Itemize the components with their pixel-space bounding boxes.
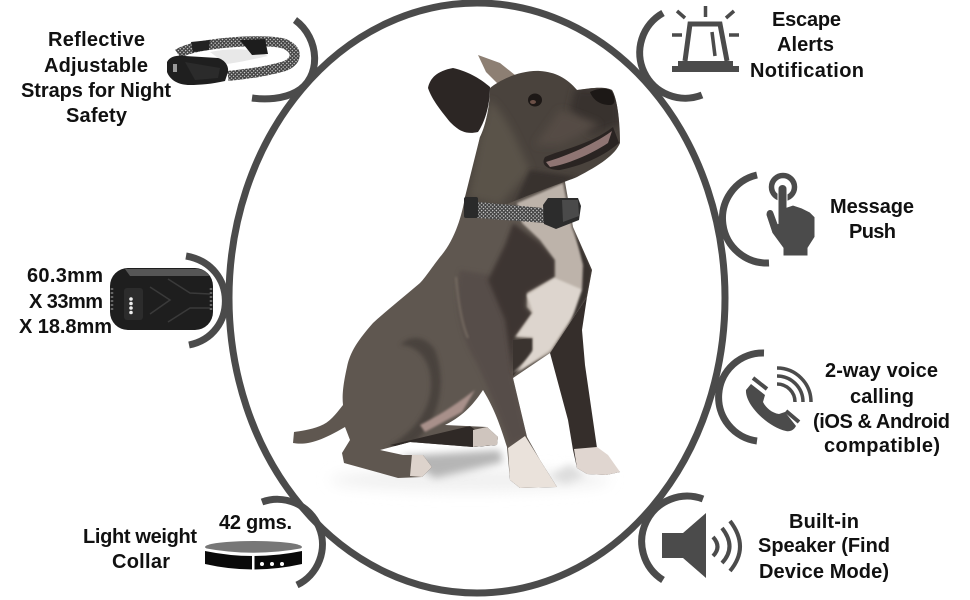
product: reflective collar xyxy=(167,39,295,85)
label: light weight collar xyxy=(83,526,197,573)
label: light weight collar: Light weight xyxy=(83,526,197,548)
label: escape alerts xyxy=(750,9,864,82)
arc: reflective straps xyxy=(252,20,315,99)
label: light weight collar: Collar xyxy=(112,551,170,573)
label: escape alerts: Notification xyxy=(750,60,864,82)
central ellipse frame xyxy=(229,3,725,593)
arc: dimensions xyxy=(186,256,225,345)
label: message push: Push xyxy=(849,221,896,243)
label: reflective straps: Reflective xyxy=(48,29,145,51)
label: dimensions: 60.3mm xyxy=(27,265,103,287)
label: voice calling: compatible) xyxy=(824,435,940,457)
arc: light weight xyxy=(262,499,322,585)
arc: speaker xyxy=(642,496,703,580)
label: speaker: Built-in xyxy=(789,511,859,533)
label: speaker: Device Mode) xyxy=(759,561,889,583)
label: reflective straps xyxy=(21,29,171,127)
label: voice calling: calling xyxy=(850,386,914,408)
label: escape alerts: Alerts xyxy=(777,34,834,56)
label: dimensions: X 33mm xyxy=(29,291,103,313)
label: reflective straps: Adjustable xyxy=(44,55,148,77)
arc: voice calling xyxy=(719,353,764,441)
arc: message push xyxy=(723,175,769,263)
label: voice calling xyxy=(813,360,950,457)
icon: touch hand xyxy=(766,176,815,256)
product: collar device xyxy=(110,268,213,330)
label: speaker: Speaker (Find xyxy=(758,535,890,557)
icon: speaker xyxy=(662,513,740,578)
label: voice calling: 2-way voice xyxy=(825,360,938,382)
label: speaker xyxy=(758,511,890,583)
label: dimensions: X 18.8mm xyxy=(19,316,112,338)
icon: phone with signal xyxy=(746,368,811,431)
label: escape alerts: Escape xyxy=(772,9,841,31)
arc: escape alerts xyxy=(640,13,702,98)
label: message push xyxy=(830,196,914,243)
label: dimensions xyxy=(19,265,112,338)
dog collar xyxy=(464,197,581,229)
label: reflective straps: Straps for Night xyxy=(21,80,171,102)
icon: alarm siren xyxy=(672,6,739,72)
label: weight: 42 gms. xyxy=(219,512,292,534)
dog photo illustration xyxy=(293,55,620,491)
label: voice calling: (iOS & Android xyxy=(813,411,950,433)
label: message push: Message xyxy=(830,196,914,218)
icon: belt xyxy=(205,541,302,573)
label: reflective straps: Safety xyxy=(66,105,128,127)
